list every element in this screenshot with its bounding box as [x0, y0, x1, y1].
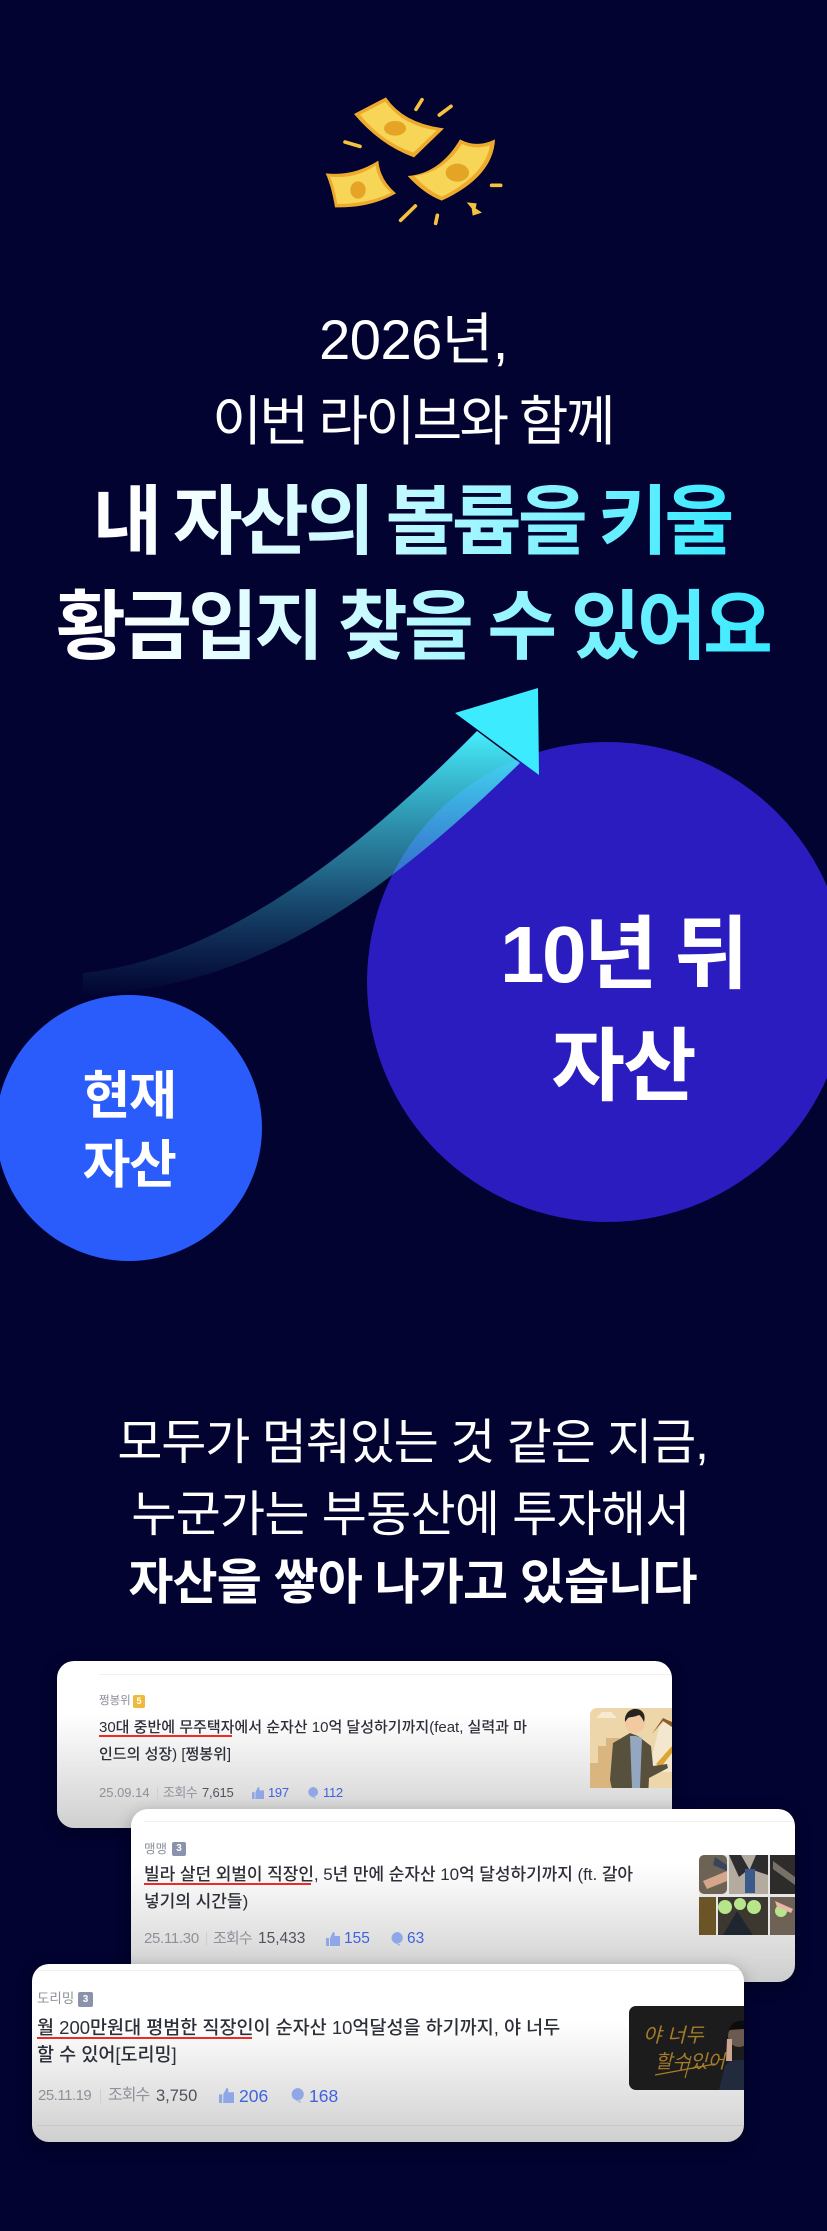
level badge: 5 — [136, 1696, 142, 1706]
post title: 빌라 살던 외벌이 직장인, 5년 만에 순자산 10억 달성하기까지 (ft. 갈아 — [144, 1865, 633, 1884]
label: 10 years later: 10년 뒤 — [500, 910, 746, 999]
arrow: growth curve — [82, 688, 539, 984]
red underline — [37, 2037, 252, 2039]
heading: with this live: 이번 라이브와 함께 — [212, 392, 613, 452]
icon: comment — [392, 1932, 403, 1946]
stats: date: 25.11.19 — [38, 2087, 91, 2104]
card: post 2 — [131, 1809, 795, 1982]
thumbnail: dark slate with gold handwriting — [629, 2006, 744, 2090]
card: post 3: 168 — [309, 2086, 338, 2106]
label: assets: 자산 — [83, 1137, 175, 1195]
card: post 2: 155 — [344, 1930, 370, 1947]
thumbnail: dark slate with gold handwriting: 야 너두 — [643, 2019, 704, 2048]
card: post 3 — [32, 1964, 744, 2142]
thumbnail: dark slate with gold handwriting: 할수있어 — [655, 2047, 727, 2074]
level badge — [172, 1842, 186, 1856]
card: post 3: 206 — [239, 2086, 268, 2106]
icon: comment — [292, 2088, 304, 2103]
icon: thumbs up — [252, 1787, 264, 1799]
level badge: 3 — [83, 1994, 88, 2005]
circle: future assets — [367, 742, 827, 1222]
stats: date: 25.09.14 — [99, 1785, 150, 1800]
card: post 1: 인드의 성장) [쩡봉위] — [99, 1746, 231, 1763]
level badge — [78, 1992, 93, 2007]
card: post 1: 197 — [268, 1785, 289, 1800]
card: post 1: 112 — [323, 1785, 343, 1800]
post title: 30대 중반에 무주택자에서 순자산 10억 달성하기까지(feat, 실력과 마 — [99, 1719, 527, 1736]
card: post 2: 15,433 — [258, 1930, 305, 1947]
author: 도리밍 — [37, 1991, 74, 2006]
icon: thumbs up — [219, 2088, 234, 2103]
card: post 2: 넣기의 시간들) — [144, 1892, 248, 1911]
icon: thumbs up — [326, 1932, 340, 1946]
card: post 3: 3,750 — [156, 2087, 197, 2105]
red underline — [99, 1735, 232, 1737]
heading: bold line 2: 황금입지 찾을 수 있어요 — [56, 585, 769, 670]
stats: views: 조회수 — [163, 1785, 197, 1800]
author: 쩡봉위 — [99, 1695, 131, 1707]
card: post 2: 63 — [407, 1930, 424, 1947]
red underline — [144, 1883, 311, 1885]
thumbnail: photo grid — [699, 1855, 795, 1935]
level badge: 3 — [176, 1843, 182, 1854]
stats: date: 25.11.30 — [144, 1930, 199, 1947]
icon: comment — [308, 1787, 318, 1799]
text: everyone seems stopped: 모두가 멈춰있는 것 같은 지금, — [117, 1416, 708, 1470]
circle: current assets — [0, 995, 262, 1261]
post title: 월 200만원대 평범한 직장인이 순자산 10억달성을 하기까지, 야 너두 — [37, 2017, 560, 2038]
stats: views: 조회수 — [213, 1930, 252, 1947]
card: post 1: 7,615 — [202, 1785, 234, 1800]
author: 맹맹 — [144, 1842, 167, 1856]
stats: views: 조회수 — [108, 2087, 149, 2104]
card: post 1 — [57, 1661, 672, 1828]
label: assets: 자산 — [551, 1022, 695, 1111]
thumbnail: man and house illustration — [590, 1708, 672, 1788]
heading: bold line 1: 내 자산의 볼륨을 키울 — [92, 480, 731, 565]
level badge — [133, 1695, 145, 1708]
card: post 3: 할 수 있어[도리밍] — [37, 2044, 177, 2065]
text: someone invests: 누군가는 부동산에 투자해서 — [131, 1488, 690, 1542]
text: building assets: 자산을 쌓아 나가고 있습니다 — [128, 1556, 697, 1610]
heading: year line: 2026년, — [319, 308, 508, 371]
label: current: 현재 — [83, 1068, 175, 1126]
icon: flying money bills — [326, 97, 502, 226]
